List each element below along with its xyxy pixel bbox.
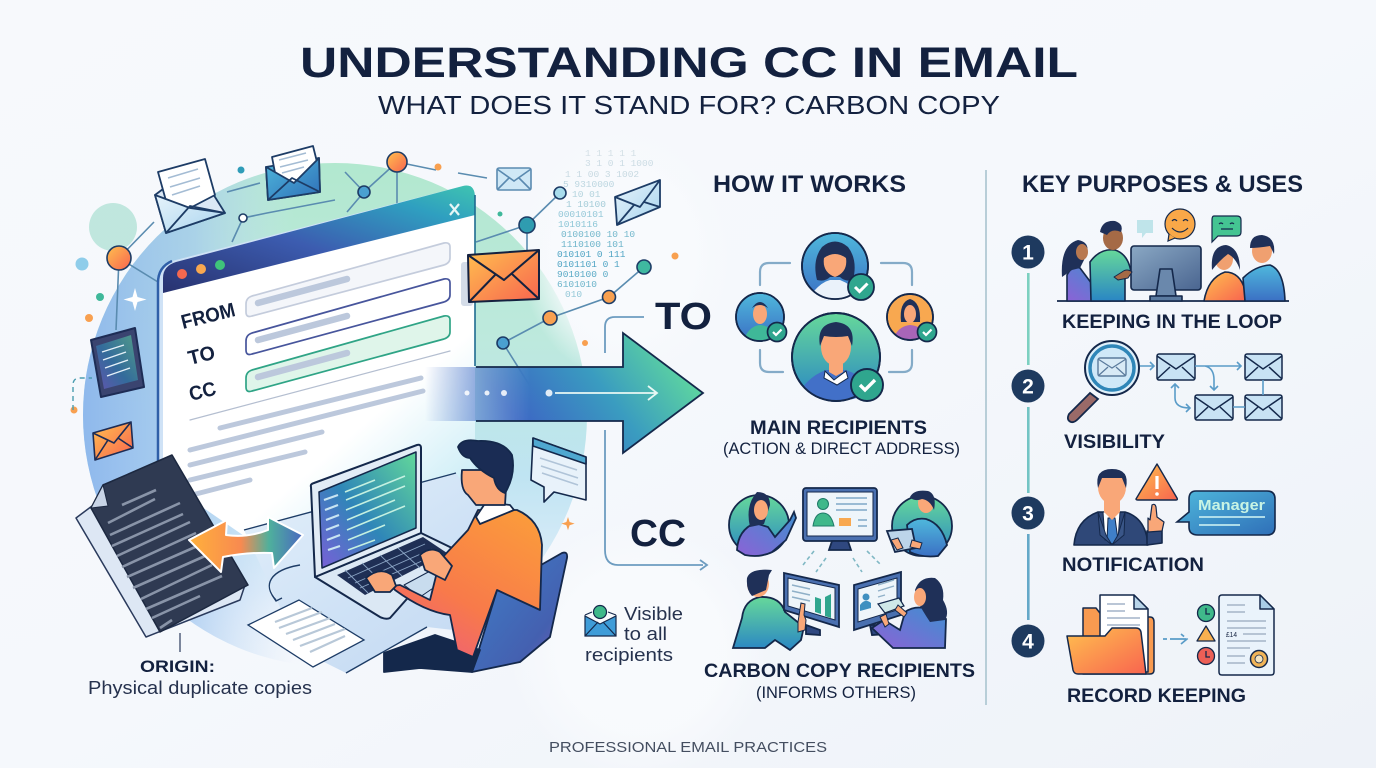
avatar: left man <box>736 293 786 342</box>
caption: VISIBILITY <box>1064 431 1165 453</box>
arrow outline <box>476 333 703 453</box>
bubble: manager: Manager <box>1198 497 1265 514</box>
desk <box>244 473 540 673</box>
main arrow <box>425 333 703 453</box>
binary data stream: 6101010 <box>557 279 597 290</box>
binary data stream: 010101 0 111 <box>557 249 626 260</box>
collar <box>476 502 514 524</box>
avatar: large man <box>792 313 883 401</box>
step 2: visibility <box>1012 341 1282 453</box>
arrow highlight <box>464 390 552 396</box>
icon: smiley bubble <box>1165 209 1195 241</box>
icon: chat bubble faint <box>1137 220 1153 238</box>
dashed arrow <box>1163 634 1187 644</box>
note text: Visible <box>624 604 683 624</box>
note: visible to all recipients <box>585 604 683 665</box>
scene: team at a monitor <box>1057 221 1289 301</box>
chair <box>472 553 567 672</box>
window right edge <box>474 195 476 366</box>
body text lines <box>190 351 450 495</box>
binary data stream: 1010116 <box>558 219 598 230</box>
heading: key purposes and uses: KEY PURPOSES & USES <box>1022 171 1303 198</box>
note: visible to all recipients: to all <box>624 624 667 644</box>
timeline connector <box>1027 273 1030 620</box>
caption: carbon copy recipients: CARBON COPY RECIPIENTS <box>704 660 975 682</box>
title: UNDERSTANDING CC IN EMAIL <box>300 39 1078 87</box>
laptop <box>311 445 452 619</box>
figure: manager <box>1074 469 1164 545</box>
caption: main recipients: MAIN RECIPIENTS <box>750 418 927 439</box>
binary data stream: 10 01 <box>572 189 601 200</box>
central monitor <box>803 488 877 550</box>
person: left woman in circle <box>729 492 796 556</box>
illustration: compose window and origin <box>70 130 770 768</box>
front hand <box>366 571 396 592</box>
caption: NOTIFICATION <box>1062 554 1204 576</box>
window buttons <box>177 260 225 279</box>
woman left <box>1067 267 1112 301</box>
binary data stream: 5 9310000 <box>563 179 615 190</box>
window close icon <box>450 204 459 215</box>
man blue <box>1243 265 1285 301</box>
icon: warning triangle <box>1136 464 1177 500</box>
icon: certificate document: £14 <box>1226 632 1237 639</box>
backdrop left crescent <box>83 163 587 667</box>
origin description: Physical duplicate copies <box>88 677 312 698</box>
torso and arm <box>392 510 542 657</box>
number badge 2 <box>1012 370 1044 402</box>
backing sheet of paper <box>76 500 245 637</box>
status icons <box>1197 604 1215 664</box>
icon: magnifier <box>1068 341 1139 422</box>
origin leader line <box>179 633 181 652</box>
inner arrow line <box>555 386 657 400</box>
caption: KEEPING IN THE LOOP <box>1062 311 1282 333</box>
step 1: keeping in the loop <box>1012 209 1289 333</box>
small curved arrow to paper <box>269 565 300 601</box>
hair <box>458 440 513 493</box>
field label: FROM: FROM <box>179 299 238 334</box>
double arrow <box>189 517 303 572</box>
panel: carbon copy recipients <box>704 488 975 702</box>
woman orange <box>1204 272 1245 301</box>
caption: action and direct address: (ACTION & DIRECT ADDRESS) <box>723 439 960 458</box>
brackets <box>760 263 912 372</box>
window frame <box>158 186 475 480</box>
envelope: open with letter, blue <box>266 146 320 200</box>
envelope: right, tilted <box>615 180 660 225</box>
note: visible to all recipients: recipients <box>585 645 673 665</box>
binary data stream: 9010100 0 <box>557 269 609 280</box>
binary data stream: 1110100 101 <box>561 239 624 250</box>
label: CC: CC <box>630 513 686 555</box>
envelope: open with letter, white <box>155 159 225 233</box>
network lines <box>116 162 644 410</box>
icon: certificate document <box>1219 595 1274 675</box>
step 3: notification <box>1012 464 1275 576</box>
person: bottom right with monitor <box>854 572 947 648</box>
binary data stream: 010 <box>565 289 582 300</box>
sparkle <box>124 288 146 311</box>
paper on desk <box>248 600 364 667</box>
origin label: ORIGIN: <box>140 657 215 676</box>
number badge 3 <box>1012 496 1044 530</box>
avatar: right woman <box>887 294 936 342</box>
number badge 1 <box>1012 236 1044 268</box>
envelope network <box>1157 354 1282 420</box>
caption: informs others: (INFORMS OTHERS) <box>756 683 916 702</box>
binary data stream: 1 10100 <box>566 199 606 210</box>
binary data stream: 0101101 0 1 <box>557 259 620 270</box>
white fade on the right of the backdrop <box>520 130 730 380</box>
number badge 3: 3 <box>1022 502 1034 526</box>
panel: main recipients <box>723 233 960 458</box>
neck and face <box>462 470 506 505</box>
dark carbon copy sheet <box>91 455 248 632</box>
binary data stream: 3 1 0 1 1000 <box>585 158 654 169</box>
person: bottom left with monitor <box>733 570 839 650</box>
person at laptop <box>366 440 567 672</box>
envelope: small light blue <box>497 168 531 190</box>
dashed connector left <box>73 378 92 410</box>
number badge 2: 2 <box>1022 376 1034 398</box>
binary data stream: 1 1 1 1 1 <box>585 148 637 159</box>
left window border <box>158 261 172 480</box>
binary data stream <box>557 148 654 300</box>
flow arrows <box>1140 362 1263 412</box>
field label: CC: CC <box>187 378 218 406</box>
tablet <box>91 328 144 397</box>
binary data stream: 00010101 <box>558 209 604 220</box>
backdrop circle <box>83 163 587 667</box>
connector to TO <box>605 317 644 353</box>
label: TO: TO <box>655 296 712 338</box>
white fade at lower right of the backdrop <box>510 520 770 768</box>
connector to CC <box>605 430 707 570</box>
orange envelope <box>461 250 539 306</box>
icon: folder with document <box>1067 595 1154 674</box>
window title bar <box>163 186 475 293</box>
back hand <box>420 550 452 580</box>
number badge 4: 4 <box>1022 630 1034 654</box>
man green <box>1090 250 1131 301</box>
sparkle orange <box>561 517 575 530</box>
network nodes <box>107 152 651 349</box>
small dots <box>70 164 678 414</box>
binary data stream: 0100100 10 10 <box>561 229 635 240</box>
number badge 1: 1 <box>1022 242 1034 264</box>
bubble: manager <box>1177 491 1275 535</box>
legs <box>384 635 480 672</box>
binary data stream: 1 1 00 3 1002 <box>565 169 639 180</box>
icon: green message bubble <box>1212 216 1241 242</box>
field label: TO: TO <box>186 342 217 370</box>
small orange envelope left <box>93 422 133 460</box>
person: right man with tablet <box>887 491 952 556</box>
number badge 4 <box>1012 624 1044 658</box>
form fields <box>246 243 450 392</box>
desk edges <box>244 473 456 673</box>
step 4: record keeping <box>1012 595 1274 707</box>
beam lines <box>803 551 881 572</box>
speech bubble <box>531 438 586 502</box>
icon: envelope with avatar <box>585 606 616 636</box>
heading: how it works: HOW IT WORKS <box>713 171 906 198</box>
subtitle: WHAT DOES IT STAND FOR? CARBON COPY <box>378 90 1000 120</box>
backdrop bubble <box>89 203 137 251</box>
avatar: top woman <box>802 233 874 300</box>
caption: RECORD KEEPING <box>1067 685 1246 707</box>
window body <box>163 215 475 540</box>
footer: PROFESSIONAL EMAIL PRACTICES <box>549 739 827 756</box>
